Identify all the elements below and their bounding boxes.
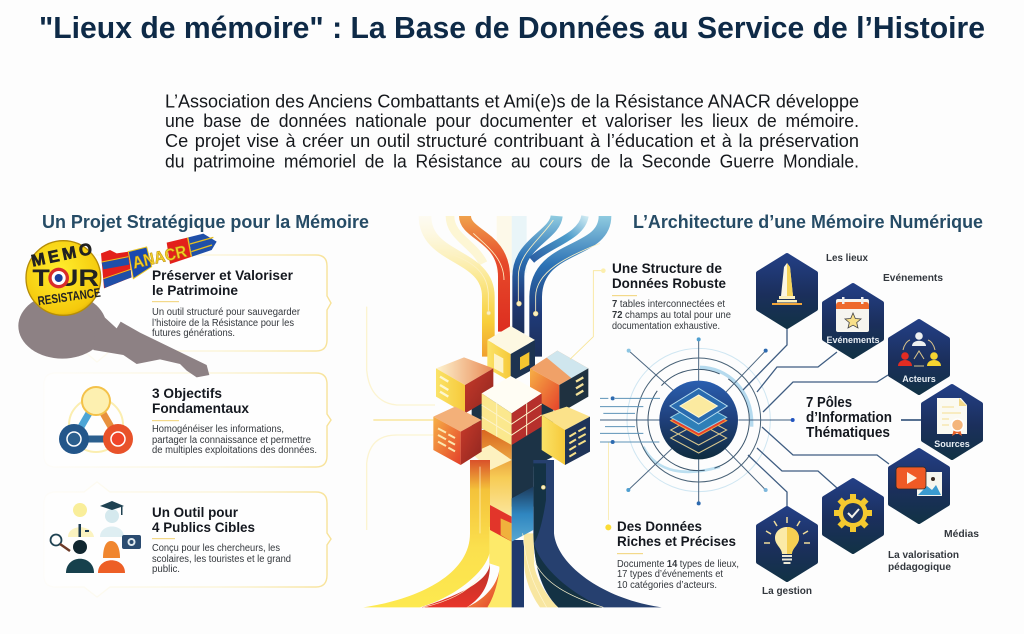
cube: top (487, 326, 535, 382)
label: médias: Médias (944, 528, 979, 540)
text: 7 pôles: 7 Pôles (806, 394, 852, 411)
panel: preserver: le Patrimoine (152, 282, 238, 298)
intro paragraph: Ce projet vise à créer un outil structuré contribuant à l’éducation et à la préservation (165, 131, 859, 151)
cube: lower left (433, 407, 482, 465)
label: les lieux: Les lieux (826, 252, 868, 264)
text: structure (612, 260, 731, 332)
text: 7 pôles: d’Information (806, 409, 892, 426)
panel: preserver: l’histoire de la Résistance pour les (152, 318, 294, 329)
label: valorisation (888, 549, 959, 573)
cube: upper right (530, 351, 588, 413)
text: données (617, 518, 739, 591)
intro paragraph (165, 92, 859, 172)
key shadow (18, 293, 209, 377)
icon: network triangle (59, 387, 133, 454)
key blade: ANACR (131, 242, 188, 273)
intro paragraph: du patrimoine mémoriel de la Résistance au cours de la Seconde Guerre Mondiale. (165, 152, 859, 172)
label: événements: Evénements (883, 272, 943, 284)
text: structure: Données Robuste (612, 275, 726, 291)
text: données: Des Données (617, 518, 702, 534)
hexagon: valorisation pédagogique (824, 480, 882, 552)
text: données: Riches et Précises (617, 533, 736, 549)
panel: objectifs: 3 Objectifs (152, 385, 222, 401)
panel: preserver: Un outil structuré pour sauvegarder (152, 307, 301, 318)
hexagon: événements: Evénements (826, 335, 880, 345)
hub disk (659, 381, 738, 459)
key head: MEMO (30, 239, 94, 271)
cube: lower right (542, 407, 590, 465)
panel: preserver: Préserver et Valoriser (152, 267, 294, 283)
key head: RESISTANCE (37, 286, 101, 308)
label: valorisation: La valorisation (888, 549, 959, 561)
callout connector: structure (570, 271, 603, 359)
hexagon: événements (824, 285, 882, 357)
layer stack (670, 388, 727, 453)
key head (26, 239, 101, 315)
panel: preserver: futures générations. (152, 328, 235, 339)
text: structure: documentation exhaustive. (612, 321, 720, 332)
key head: T UR (32, 265, 99, 292)
central data tree (363, 216, 662, 607)
callout dot: données (605, 524, 611, 530)
callout dot: structure (601, 268, 606, 273)
panel: publics (44, 482, 331, 597)
hexagon: les lieux (758, 255, 816, 327)
faint connectors to cards (367, 307, 435, 530)
cube: upper left (436, 357, 493, 413)
hexagon: sources (923, 386, 981, 458)
key blade (101, 234, 217, 288)
panel: publics: 4 Publics Cibles (152, 519, 255, 535)
text: structure: 7 tables interconnectées et (612, 299, 725, 310)
heading: left column: Un Projet Stratégique pour la Mémoire (42, 212, 369, 232)
heading: right column: L’Architecture d’une Mémoire Numérique (633, 212, 983, 232)
text: structure: 72 champs au total pour une (612, 310, 731, 321)
text: 7 pôles: Thématiques (806, 424, 890, 441)
callout connector: données (607, 442, 609, 520)
lower trunk (363, 380, 662, 607)
icon: four audiences (50, 501, 141, 573)
cube: centre (482, 376, 542, 445)
text: structure: Une Structure de (612, 260, 722, 276)
panel: preserver (44, 255, 331, 362)
intro paragraph: une base de données nationale pour documenter et valoriser les lieux de mémoire. (165, 111, 859, 131)
panel: objectifs (44, 373, 331, 467)
hub nodes (611, 337, 795, 505)
text: données: 17 types d’événements et (617, 569, 723, 580)
upper streams (425, 216, 605, 357)
label: gestion: La gestion (762, 585, 812, 597)
hexagon: acteurs (890, 321, 948, 393)
title: "Lieux de mémoire" : La Base de Données au Service de l’Histoire (39, 10, 985, 45)
intro paragraph: L’Association des Anciens Combattants et Ami(e)s de la Résistance ANACR développe (165, 92, 859, 112)
text: données: Documente 14 types de lieux, (617, 559, 739, 570)
hexagon: sources: Sources (934, 439, 970, 449)
panel: objectifs: Fondamentaux (152, 400, 249, 416)
stream nodes (487, 301, 538, 316)
hub: data layers (600, 337, 795, 505)
panel: objectifs: partager la connaissance et permettre (152, 435, 311, 446)
panel: objectifs: Homogénéiser les informations, (152, 424, 284, 435)
label: valorisation: pédagogique (888, 561, 951, 573)
text: 7 pôles (806, 394, 892, 441)
hexagon: acteurs: Acteurs (902, 374, 936, 384)
key logo: Memo Tour Résistance (18, 234, 217, 377)
panel: publics: Un Outil pour (152, 504, 239, 520)
hexagon: médias (890, 450, 948, 522)
hub rings and spokes (600, 339, 793, 503)
hexagon: gestion (758, 508, 816, 580)
connector lines to hexagons (743, 329, 922, 507)
text: données: 10 catégories d’acteurs. (617, 580, 717, 591)
panel: publics: scolaires, les touristes et le grand (152, 554, 291, 565)
panel: publics: public. (152, 564, 180, 575)
panel: publics: Conçu pour les chercheurs, les (152, 543, 280, 554)
panel: objectifs: de multiples exploitations des données. (152, 445, 317, 456)
